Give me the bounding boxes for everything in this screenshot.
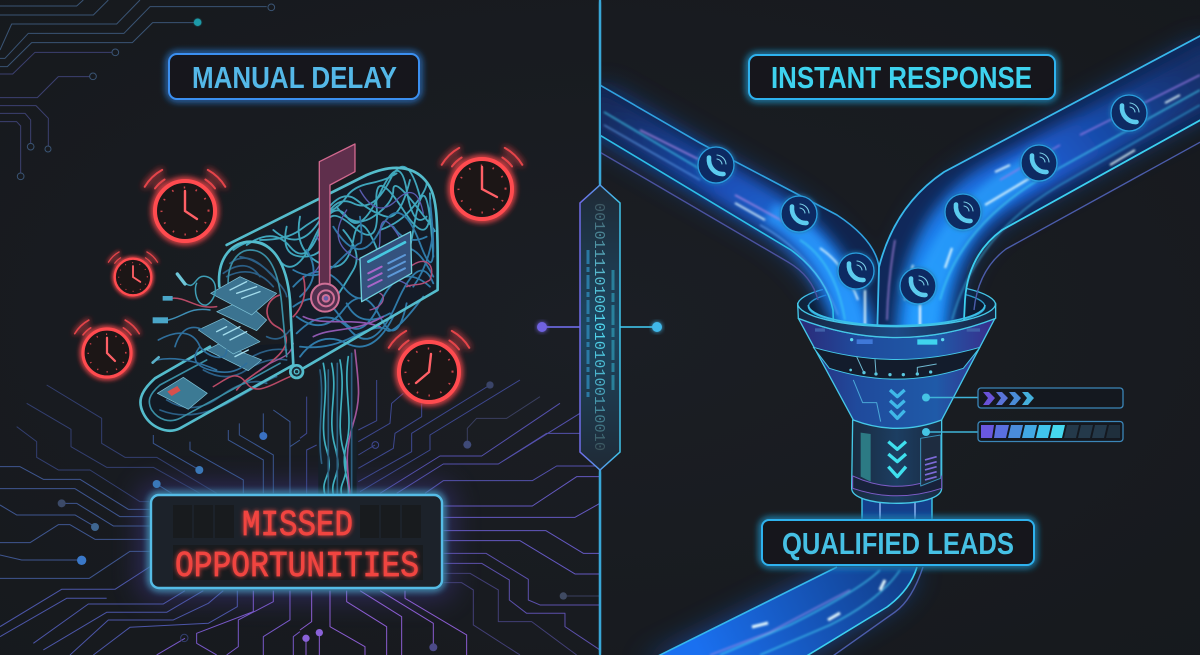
alarm clock: small left (108, 252, 158, 295)
band markers (857, 357, 937, 373)
phone icon 7 (1111, 95, 1147, 131)
funnel dark band (813, 347, 980, 379)
glow behind pipes (590, 68, 1200, 320)
phone icon 3 (838, 253, 874, 289)
display: missed opportunities (151, 495, 442, 588)
circuit traces: bottom centre (300, 380, 600, 655)
side card (360, 232, 412, 302)
mailbox post (318, 343, 359, 495)
cone circuit (853, 380, 881, 422)
phone icon 1 (698, 147, 734, 183)
paper sheets spilling out (198, 277, 277, 371)
mailbox outline (140, 168, 438, 431)
loose cables and connectors (153, 274, 290, 389)
label: qualified leads: QUALIFIED LEADS (782, 526, 1014, 561)
phone icon 2 (781, 196, 817, 232)
mailbox body (220, 169, 437, 368)
rim lights (815, 328, 980, 345)
tray card (157, 377, 207, 409)
rim inner lip (808, 305, 985, 326)
binary data capsule (580, 185, 620, 470)
tangled wires (160, 167, 435, 415)
connector: purple node (537, 322, 580, 332)
alarm clock: top left (145, 170, 225, 241)
pipe: left feed (601, 84, 879, 324)
circuit traces: top left (0, 0, 275, 180)
output pipe to qualified leads (862, 495, 932, 525)
display text: MISSED (242, 505, 353, 546)
mailbox tangled with wires (140, 144, 438, 495)
unlit display digits (173, 505, 423, 580)
connector: cyan node (620, 322, 662, 332)
right pipe light streaks (887, 75, 1200, 335)
flag pivot (311, 284, 339, 312)
funnel upper rim front (798, 303, 996, 337)
alarm clock: top right (442, 148, 522, 219)
cone chevrons (890, 390, 905, 418)
heading: instant response (749, 55, 1055, 99)
heading: manual delay (169, 54, 419, 99)
heading: manual delay: MANUAL DELAY (192, 60, 397, 95)
pipe: right feed (877, 28, 1200, 340)
alarm clock: lower right (389, 331, 469, 402)
open door tray (141, 343, 293, 430)
display text: OPPORTUNITIES (175, 546, 419, 587)
circuit traces: bottom left (0, 385, 300, 655)
funnel throat (852, 420, 942, 503)
display text (175, 505, 419, 587)
funnel cone (798, 318, 995, 428)
pipes clipped to right half (590, 28, 1200, 340)
binary digits: 001011110100101010100110010 (590, 203, 607, 451)
tray card stamp (167, 386, 181, 396)
left pipe light streaks (604, 112, 865, 325)
phone icon 4 (900, 268, 936, 304)
phone icon 6 (1021, 145, 1057, 181)
output pipe: stream to lower left (640, 567, 923, 655)
connector lines to progress bars (922, 394, 978, 436)
stream light streaks (710, 570, 900, 655)
alarm clock: far left (75, 320, 139, 377)
display glow (140, 485, 452, 598)
progress bar: chevrons (978, 388, 1123, 408)
phone icon 5 (945, 194, 981, 230)
funnel back rim (798, 282, 996, 328)
label: qualified leads (762, 520, 1034, 565)
funnel (798, 303, 996, 503)
central divider line (599, 0, 601, 655)
heading: instant response: INSTANT RESPONSE (771, 60, 1032, 95)
flag (319, 144, 355, 287)
progress bar: segments (978, 422, 1123, 442)
